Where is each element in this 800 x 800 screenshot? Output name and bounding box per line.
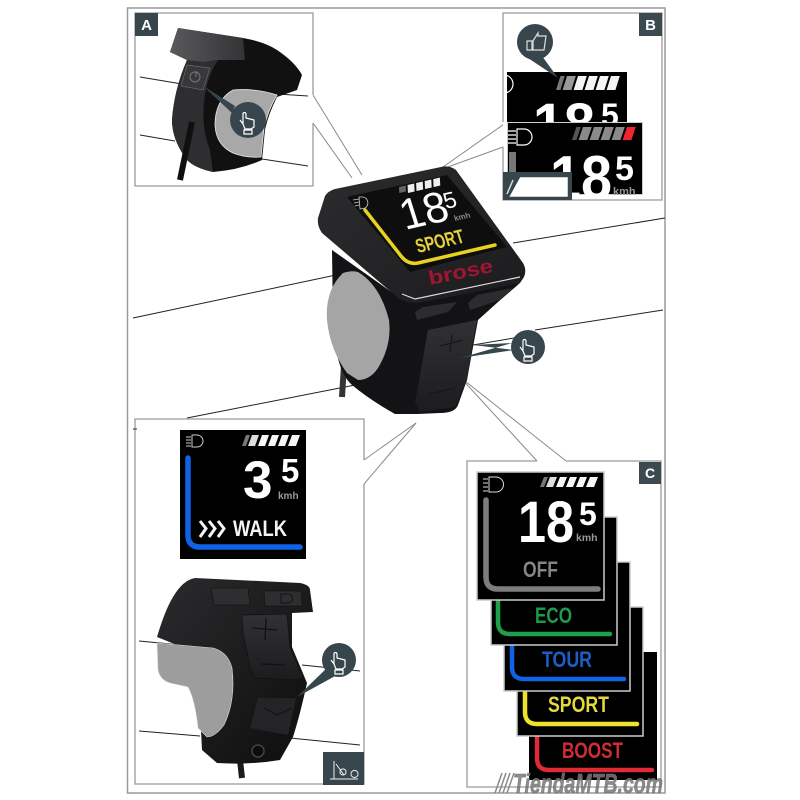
screen: boost: BOOST — [562, 738, 623, 763]
walk mode line — [188, 458, 300, 547]
tick mark — [133, 428, 137, 430]
screen: eco — [491, 517, 617, 645]
screen: tour: TOUR — [542, 647, 592, 672]
translucent clamp lower — [157, 643, 233, 737]
walk panel frame — [135, 419, 364, 784]
panel: walk mode — [133, 419, 364, 785]
off label: OFF — [523, 557, 558, 582]
audio jack — [252, 745, 264, 757]
watermark — [495, 768, 663, 799]
brand logo: brose — [427, 255, 495, 290]
translucent handlebar clamp — [327, 271, 390, 380]
device side band A — [172, 60, 218, 172]
page frame — [128, 8, 665, 793]
handlebar line right upper — [513, 218, 665, 243]
connector lines: panel B to display — [443, 122, 507, 168]
display headlight icon — [353, 197, 368, 209]
screen: charge level full: 18 — [533, 92, 595, 157]
control unit buttons — [211, 588, 302, 606]
panel A frame — [135, 13, 313, 186]
screen: charge level low — [507, 122, 643, 213]
walk speed: 3 — [243, 451, 272, 510]
power button — [181, 65, 210, 90]
control unit body — [157, 578, 313, 764]
screen: eco: ECO — [535, 603, 572, 628]
display unit: kmh — [453, 211, 472, 223]
top buttons — [415, 288, 513, 320]
walk decimal: 5 — [281, 452, 299, 489]
off speed: 18 — [518, 490, 574, 555]
walk headlight icon — [186, 435, 203, 447]
walk label: WALK — [233, 516, 287, 541]
plus minus pad — [415, 320, 477, 412]
walk screen — [180, 430, 306, 559]
panel C frame — [467, 461, 661, 787]
display speed 18: 18 — [393, 182, 455, 240]
screen: charge level low: kmh — [613, 186, 636, 198]
plus minus pad lower — [242, 614, 303, 680]
device top grey plate A — [170, 28, 245, 62]
panel B: battery and charge status — [495, 13, 662, 213]
display glass — [347, 175, 507, 272]
panel B frame — [503, 13, 662, 200]
connector lines: panel A to display — [313, 95, 362, 178]
icon: pressing finger plus/minus — [460, 330, 545, 364]
screen: sport — [517, 607, 643, 736]
icon: walk assist badge — [323, 752, 364, 785]
panel C: assist modes — [467, 461, 661, 787]
handlebar line left — [133, 272, 350, 318]
display speed decimal: 5 — [440, 186, 460, 214]
mounting cable — [342, 365, 344, 397]
handlebar lines A — [140, 77, 308, 166]
off battery bars — [540, 477, 598, 487]
off decimal: 5 — [579, 496, 597, 532]
clamp body — [332, 250, 520, 414]
screen: charge level full — [507, 72, 627, 157]
badge A — [135, 13, 158, 36]
icon: pressing finger walk — [297, 643, 356, 697]
connector lines: plus/minus pad to panel C — [460, 377, 566, 461]
badge B: B — [645, 17, 656, 34]
walk button — [250, 698, 296, 735]
translucent clamp A — [215, 90, 277, 157]
screen: tour — [504, 562, 630, 691]
main device illustration — [133, 166, 665, 418]
icon: battery badge — [503, 172, 572, 200]
screen: charge level low: 5 — [615, 150, 634, 188]
display mode label: SPORT — [413, 226, 467, 258]
display battery bars — [399, 178, 440, 195]
housing highlight — [402, 277, 520, 299]
lower cable — [240, 760, 242, 778]
badge B — [639, 13, 662, 36]
lower handlebar lines — [139, 641, 360, 745]
walk chevrons — [200, 521, 224, 537]
icon: pressing finger A — [203, 86, 266, 138]
screen: charge level full: 5 — [601, 97, 619, 133]
icon: thumbs up callout — [517, 24, 558, 78]
device body A — [170, 28, 302, 172]
panel A: power button — [135, 13, 313, 186]
mounting cable A — [180, 122, 192, 180]
walk battery bars — [242, 435, 300, 446]
display housing — [318, 166, 525, 303]
badge A: A — [141, 17, 152, 34]
screen: off — [477, 472, 604, 600]
screen: boost — [529, 652, 657, 780]
off unit: kmh — [576, 532, 598, 544]
screen: charge level low: 18 — [550, 144, 612, 213]
handlebar line right lower — [473, 310, 663, 345]
screen: sport: SPORT — [548, 692, 609, 717]
badge C — [639, 462, 661, 484]
off mode line — [486, 500, 598, 589]
handlebar line lower — [187, 385, 355, 418]
walk unit: kmh — [278, 491, 299, 502]
watermark: TiendaMTB.com — [513, 768, 663, 799]
mode line sport — [365, 210, 495, 263]
off headlight icon — [483, 477, 504, 492]
badge C: C — [645, 465, 655, 481]
connector lines: walk panel to control unit — [364, 423, 416, 484]
